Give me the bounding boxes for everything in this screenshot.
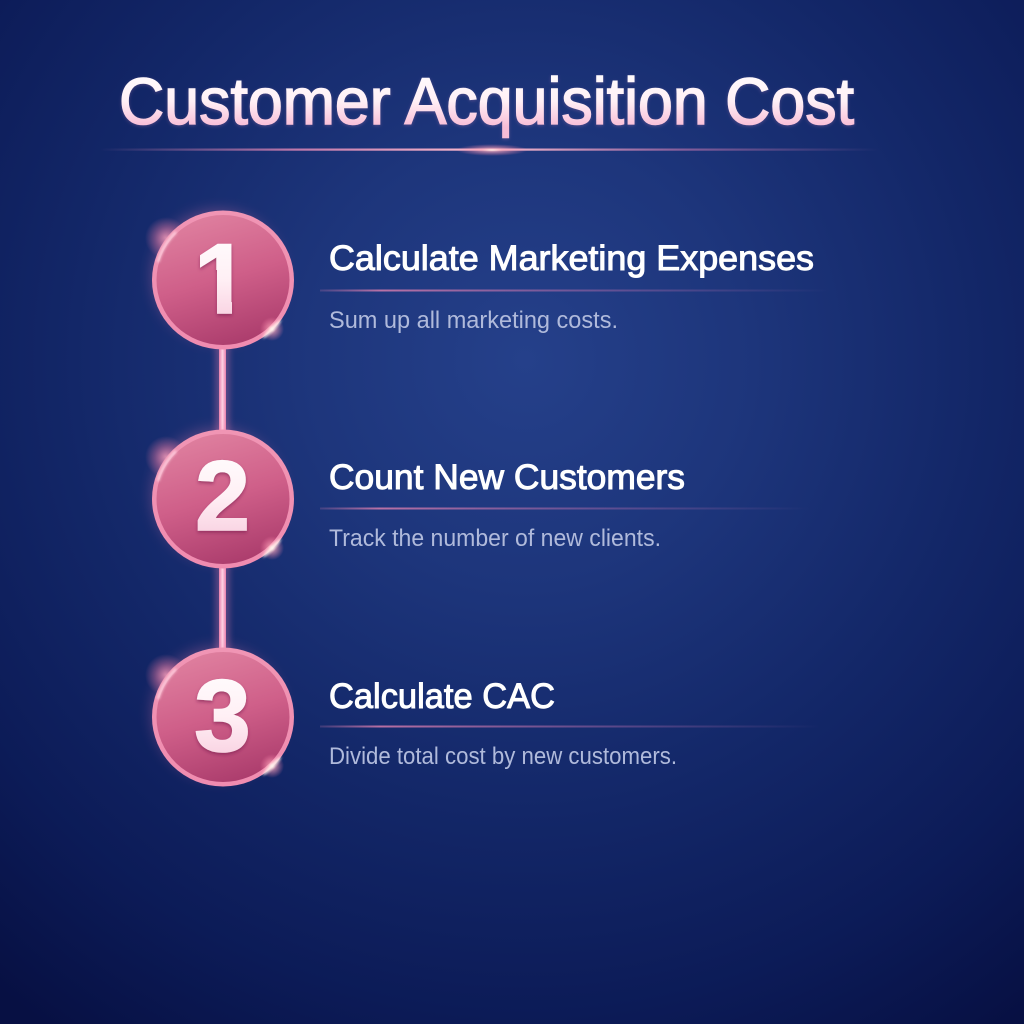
- step 3 badge: [145, 647, 294, 786]
- step 3 description: Divide total cost by new customers.: [329, 743, 677, 770]
- step 2 description: Track the number of new clients.: [329, 525, 661, 552]
- step 1 badge: [145, 210, 294, 350]
- connector: step 2 to 3: [215, 565, 230, 653]
- title underline with flare: [100, 144, 880, 156]
- number 3: 3: [194, 659, 251, 773]
- step 2 divider: [320, 508, 810, 510]
- step 1 heading: Calculate Marketing Expenses: [329, 239, 814, 278]
- number 2: 2: [195, 440, 250, 551]
- step 3 heading: Calculate CAC: [329, 677, 555, 716]
- step 3 divider: [320, 726, 820, 728]
- title: Customer Acquisition Cost: [119, 64, 854, 138]
- number 1: 1: [194, 223, 249, 334]
- step 1 divider: [320, 290, 830, 292]
- connector: step 1 to 2: [215, 345, 230, 435]
- step 2 badge: [145, 429, 294, 568]
- step 2 heading: Count New Customers: [329, 458, 685, 497]
- step 1 description: Sum up all marketing costs.: [329, 307, 618, 334]
